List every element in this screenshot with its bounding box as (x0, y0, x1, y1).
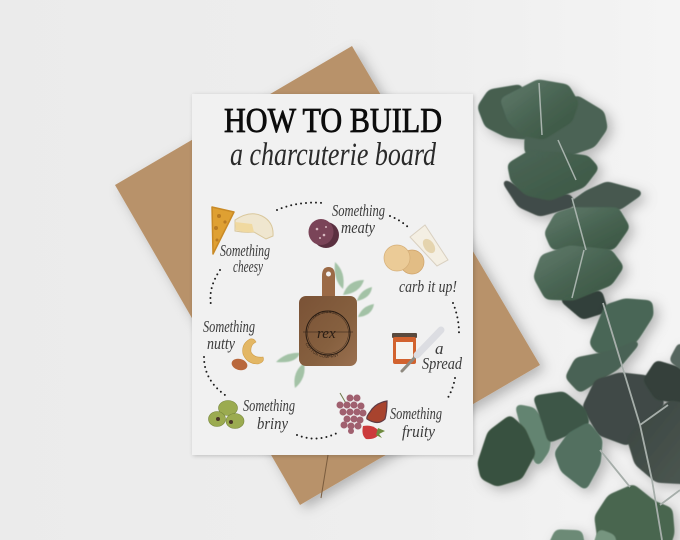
label: something cheesy: Something (220, 241, 270, 260)
label: something cheesy (220, 241, 270, 276)
logo: THE RUSTY (312, 310, 336, 318)
label: something briny (243, 396, 295, 433)
eucalyptus branch: lower (480, 301, 680, 540)
label: something meaty: meaty (341, 218, 375, 237)
label: something cheesy: cheesy (233, 257, 263, 276)
label: something fruity (390, 404, 442, 441)
icon: nuts (230, 339, 263, 372)
label: something meaty (332, 201, 385, 237)
icon: grapes (336, 393, 366, 434)
icon: jam jar and knife (392, 330, 441, 371)
logo: rex (317, 326, 336, 342)
label: carb it up: carb it up! (399, 277, 457, 296)
label: something nutty: nutty (207, 334, 235, 353)
icon: strawberry (362, 426, 385, 439)
icon: fig (367, 401, 387, 422)
dotted circle path (204, 203, 459, 439)
label: something fruity: Something (390, 404, 442, 423)
subtitle: a charcuterie board (230, 137, 436, 173)
label: a spread (422, 339, 462, 373)
eucalyptus branch: upper (480, 82, 640, 317)
icon: cutting board (299, 267, 357, 366)
icon: crackers (384, 225, 448, 274)
label: something nutty (203, 317, 255, 353)
icon: board leaves (276, 262, 374, 388)
icon: olives (208, 400, 244, 428)
card (192, 94, 473, 455)
label: something briny: briny (257, 414, 288, 433)
label: something briny: Something (243, 396, 295, 415)
title: HOW TO BUILD (224, 101, 442, 140)
logo: COTTON COMPANY (306, 343, 338, 358)
envelope (115, 46, 540, 505)
icon: salami (308, 219, 339, 248)
icon: cheese (212, 207, 273, 254)
label: something fruity: fruity (402, 422, 435, 441)
label: something nutty: Something (203, 317, 255, 336)
label: a spread: Spread (422, 354, 462, 373)
label: a spread: a (435, 339, 444, 358)
label: something meaty: Something (332, 201, 385, 220)
logo (303, 310, 353, 358)
